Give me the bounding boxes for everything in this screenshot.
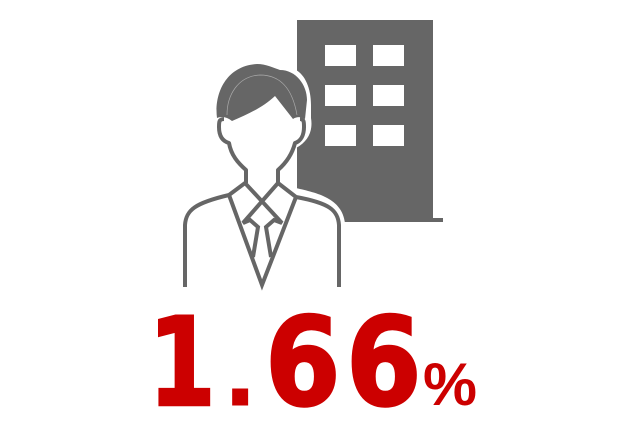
number <box>148 292 422 424</box>
number: . <box>224 327 256 424</box>
value: 1.66% <box>148 292 477 424</box>
percent sign: % <box>423 351 477 418</box>
icon: office building <box>297 20 443 222</box>
icon: businessperson <box>185 64 345 287</box>
